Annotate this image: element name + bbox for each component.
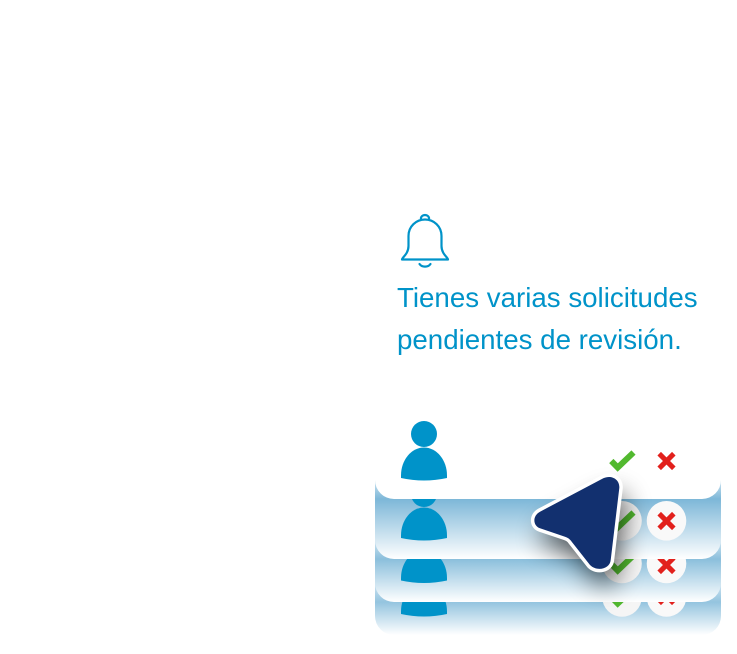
icon: check	[611, 452, 634, 468]
icon: bell	[402, 215, 448, 267]
icon: cursor arrow	[534, 477, 625, 585]
card: first request	[375, 421, 721, 499]
text: notification message: Tienes varias solicitudes	[397, 282, 698, 313]
card: second request	[375, 478, 721, 559]
icon: cross	[659, 454, 674, 468]
icon: person	[401, 421, 447, 480]
card: third request	[375, 538, 721, 602]
card: fourth request	[375, 577, 721, 635]
text: notification message: pendientes de revisión.	[397, 324, 682, 355]
